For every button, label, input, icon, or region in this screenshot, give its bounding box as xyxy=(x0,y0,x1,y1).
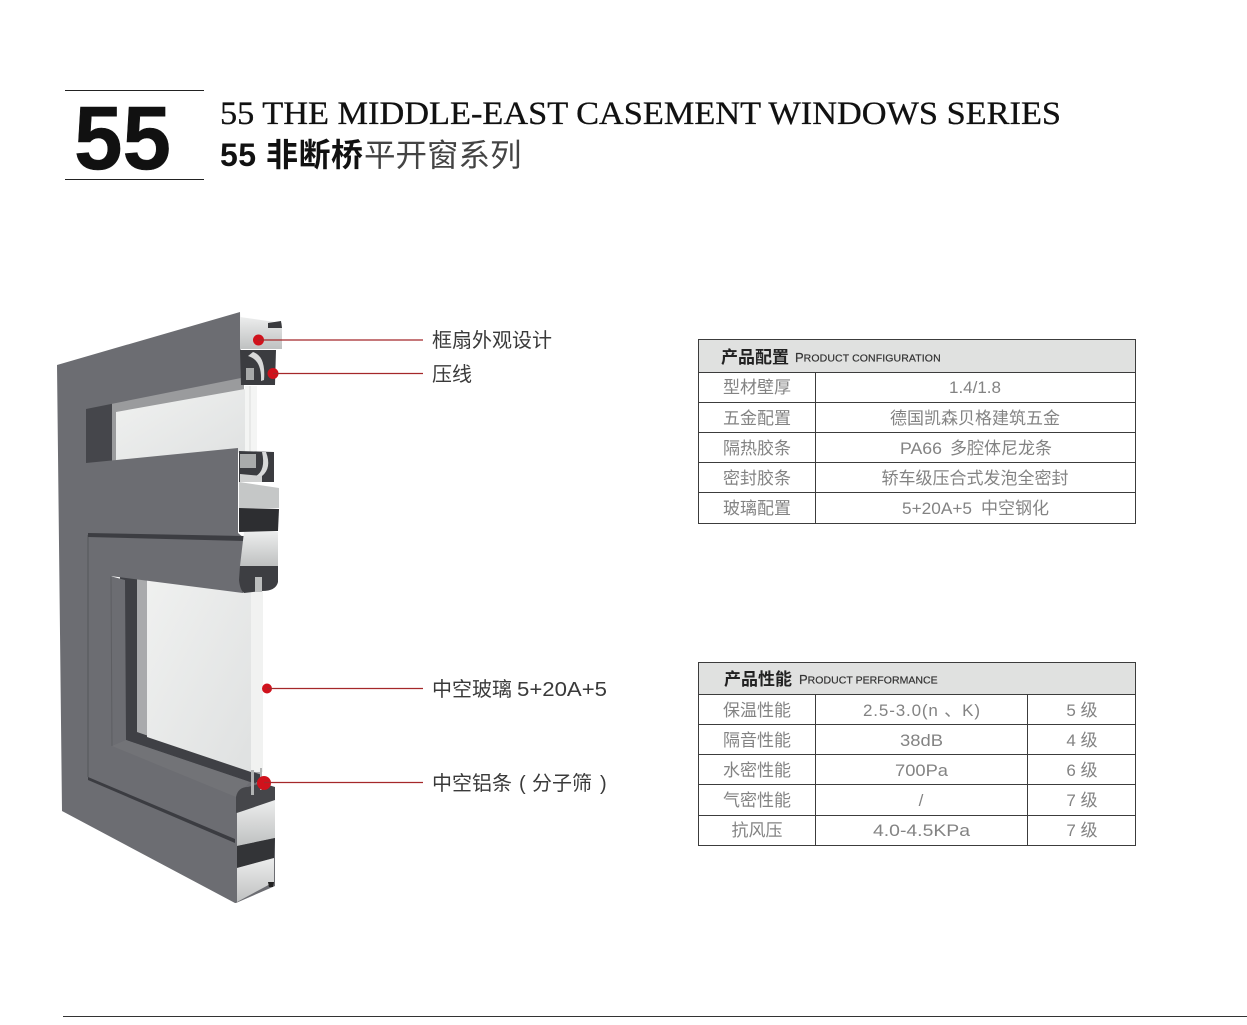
table: product performance: 5 级 xyxy=(1066,701,1098,720)
table: product performance: 7 级 xyxy=(1066,821,1098,840)
callout: insulating glass xyxy=(262,678,607,701)
table: product configuration: 型材壁厚 xyxy=(723,378,791,397)
table: product performance: 38dB xyxy=(900,731,943,750)
header: series number block: 55 xyxy=(74,89,171,189)
title: Chinese: 55 非断桥 xyxy=(220,137,363,173)
table: product performance: 气密性能 xyxy=(723,791,791,810)
table: product performance: 6 级 xyxy=(1066,761,1098,780)
title: Chinese: 平开窗系列 xyxy=(364,137,522,173)
top profile section xyxy=(240,317,282,385)
table heading: 产品配置 xyxy=(721,348,789,367)
table heading: 产品性能 xyxy=(724,670,792,689)
table: product performance: 抗风压 xyxy=(732,821,782,840)
table: product configuration: 玻璃配置 xyxy=(723,499,791,518)
upper glass opening xyxy=(86,376,257,470)
table heading: P xyxy=(795,350,804,365)
table: product performance: 水密性能 xyxy=(723,761,791,780)
table: product performance: 700Pa xyxy=(895,761,949,780)
table: product configuration xyxy=(698,340,1136,524)
table: product performance xyxy=(698,662,1136,846)
table heading: RODUCT CONFIGURATION xyxy=(804,352,941,364)
table: product configuration: 密封胶条 xyxy=(723,469,791,488)
title: English: 55 THE MIDDLE-EAST CASEMENT WINDOWS SERIES xyxy=(220,96,1061,132)
table: product performance: 隔音性能 xyxy=(723,731,791,750)
table: product performance: 7 级 xyxy=(1066,791,1098,810)
aluminium frame body xyxy=(57,312,275,903)
callout: hollow aluminium spacer: ( xyxy=(519,773,526,795)
table: product performance: 保温性能 xyxy=(723,701,791,720)
callout: glazing bead xyxy=(268,363,472,386)
table: product configuration: 德国凯森贝格建筑五金 xyxy=(890,409,1060,428)
callout: frame and sash appearance design xyxy=(253,329,552,352)
callout: frame and sash appearance design: 框扇外观设计 xyxy=(432,329,552,352)
callout: hollow aluminium spacer: ) xyxy=(600,773,607,795)
table: product performance: 4 级 xyxy=(1066,731,1098,750)
bottom profile section xyxy=(236,768,275,902)
callout: insulating glass: 中空玻璃 xyxy=(432,679,512,701)
table: product performance: / xyxy=(919,791,924,810)
table: product configuration: 多腔体尼龙条 xyxy=(950,439,1052,458)
table: product configuration: 中空钢化 xyxy=(981,499,1049,518)
window section illustration xyxy=(57,312,282,903)
table heading: RODUCT PERFORMANCE xyxy=(808,674,938,686)
lower glass opening xyxy=(120,570,263,786)
callout: hollow aluminium spacer: 中空铝条 xyxy=(432,773,512,795)
table: product configuration: 轿车级压合式发泡全密封 xyxy=(882,469,1068,488)
table: product performance: 2.5-3.0(n 、K) xyxy=(863,701,980,720)
table: product performance: 4.0-4.5KPa xyxy=(873,821,971,840)
callout: glazing bead: 压线 xyxy=(432,363,472,386)
callout: hollow aluminium spacer xyxy=(257,772,607,795)
table: product configuration: PA66 xyxy=(900,439,942,458)
table: product configuration: 隔热胶条 xyxy=(723,439,791,458)
middle profile section xyxy=(239,451,279,593)
table: product configuration: 五金配置 xyxy=(723,409,791,428)
callout: hollow aluminium spacer: 分子筛 xyxy=(532,772,592,795)
table: product configuration: 1.4/1.8 xyxy=(949,378,1001,397)
callout: insulating glass: 5+20A+5 xyxy=(517,679,607,701)
table heading: P xyxy=(799,672,808,687)
table: product configuration: 5+20A+5 xyxy=(902,499,972,518)
